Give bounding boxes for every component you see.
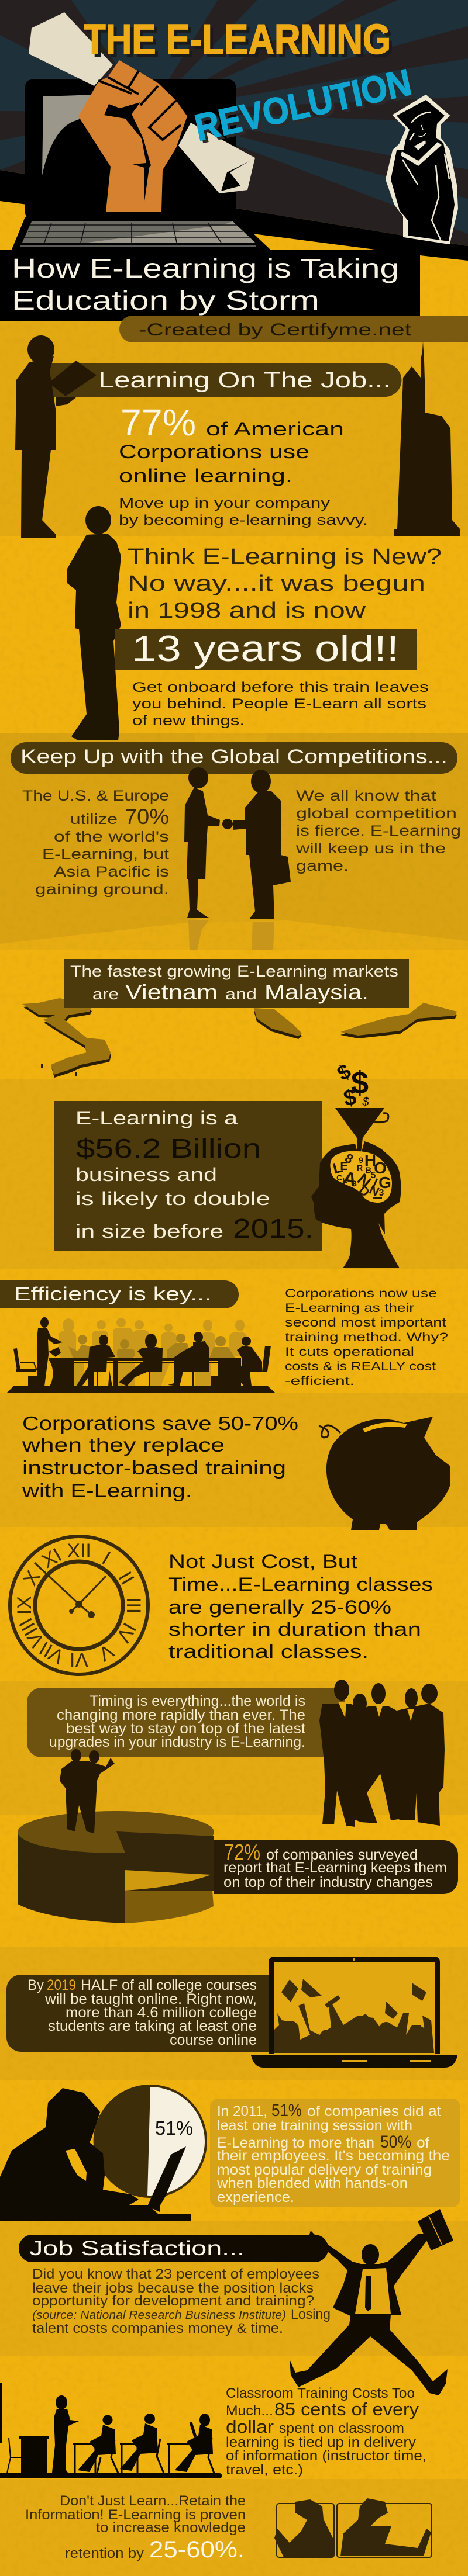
heading panel: how e-learning: [0, 250, 420, 321]
job satisfaction text: Did you know that 23 percent of employees: [32, 2266, 319, 2282]
highlight 13 years old: 13 years old!!: [132, 629, 399, 669]
heading pill: Keep Up with the Global Competitions...: [20, 746, 448, 768]
heading panel: how e-learning: How E-Learning is Taking: [12, 253, 399, 283]
panel: 56.2 billion business: [54, 1059, 401, 1268]
panel: timing is everything: [27, 1680, 445, 1827]
man at laptop silhouette: [0, 2088, 191, 2221]
seated woman: [145, 1334, 157, 1349]
onboard text: [132, 680, 429, 729]
business group silhouettes: [319, 1680, 445, 1827]
learning letters in brain: 5: [371, 1171, 376, 1180]
seated man two: [194, 1332, 203, 1342]
stat 77 percent: [119, 401, 344, 486]
jumping businessman silhouette: [290, 2209, 453, 2395]
heading pill: Efficiency is key...: [14, 1283, 211, 1304]
retention text: to increase knowledge: [96, 2520, 246, 2536]
job satisfaction text: (source: National Research Business Institute): [32, 2309, 286, 2322]
panel: 51 percent: [0, 2086, 460, 2221]
classroom text: dollar: [226, 2416, 274, 2437]
learning letters in brain: N: [354, 1170, 374, 1192]
51 percent text box: [210, 2099, 460, 2207]
left text: The U.S. & Europe: [22, 788, 169, 804]
man reading silhouette: [15, 335, 97, 538]
dollar signs: $: [362, 1096, 369, 1109]
college callout: [6, 1975, 275, 2052]
51 percent text box: of companies did at: [307, 2103, 441, 2120]
classroom text: travel, etc.): [226, 2462, 303, 2478]
savings text: [22, 1412, 298, 1501]
heading panel: how e-learning: Education by Storm: [12, 285, 319, 316]
student desks and figures: [73, 2415, 118, 2473]
markets callout: The fastest growing E-Learning markets: [70, 962, 398, 980]
left text: Asia Pacific is: [54, 864, 169, 880]
business text box: E-Learning is a: [75, 1107, 238, 1128]
clock icon: II: [113, 1568, 139, 1588]
efficiency text: -efficient.: [285, 1374, 355, 1388]
timing callout: upgrades in your industry is E-Learning.: [49, 1734, 305, 1750]
learning letters in brain: G: [378, 1173, 391, 1192]
two men walking silhouette: [60, 1749, 115, 1833]
business text box: $56.2 Billion: [76, 1133, 261, 1164]
efficiency text: training method. Why?: [285, 1331, 448, 1344]
learning letters in brain: L: [331, 1158, 345, 1178]
learning letters in brain: I: [371, 1176, 380, 1189]
72 percent callout: 72%: [224, 1840, 260, 1865]
3d pie chart: [18, 1811, 214, 1923]
job satisfaction text: [32, 2266, 331, 2336]
learning letters in brain: 9: [359, 1155, 363, 1165]
left text: gaining ground.: [35, 881, 169, 898]
onboard text: of new things.: [132, 713, 245, 729]
markets callout: Vietnam: [125, 980, 218, 1004]
efficiency text: Corporations now use: [285, 1287, 437, 1300]
learning letters in brain: B: [351, 1179, 357, 1188]
learning letters in brain: D: [356, 1183, 373, 1200]
dollar signs: $: [333, 1059, 355, 1085]
time text: Time...E-Learning classes: [168, 1574, 433, 1595]
laptop with keyboard: [12, 79, 270, 250]
college callout: 2019: [47, 1977, 76, 1993]
efficiency text: E-Learning as their: [285, 1301, 414, 1315]
title: THE E-LEARNING: [84, 16, 391, 63]
business text box: in size before: [75, 1221, 223, 1242]
efficiency text: costs & is REALLY cost: [285, 1360, 436, 1373]
clock icon: X: [19, 1567, 45, 1590]
markets callout: Malaysia.: [264, 980, 369, 1004]
time text: traditional classes.: [168, 1641, 369, 1662]
51 percent text box: experience.: [217, 2189, 294, 2205]
question text: [128, 545, 442, 623]
classroom silhouettes: [0, 2383, 222, 2478]
timing callout: Timing is everything...the world is: [90, 1693, 305, 1709]
question text: Think E-Learning is New?: [128, 545, 442, 569]
time text: [168, 1551, 433, 1662]
classroom text: Classroom Training Costs Too: [226, 2385, 415, 2401]
51 percent text box: In 2011,: [217, 2103, 267, 2120]
onboard text: you behind. People E-Learn all sorts: [132, 696, 426, 712]
second student: [120, 2414, 164, 2473]
standing presenter: [40, 1317, 49, 1328]
left chair and box: [13, 1348, 20, 1370]
meeting room silhouettes: [7, 1317, 275, 1393]
retention text: retention by: [65, 2546, 144, 2561]
learning letters in brain: [331, 1151, 391, 1200]
left text: utilize: [70, 811, 118, 827]
heading pill: [0, 1280, 239, 1308]
clock icon: [10, 1536, 148, 1674]
right text: [295, 788, 461, 874]
time text: are generally 25-60%: [168, 1597, 391, 1618]
credit pill: [119, 316, 468, 342]
learning letters in brain: N: [367, 1182, 381, 1199]
left text: E-Learning, but: [42, 846, 169, 863]
savings text: with E-Learning.: [22, 1480, 192, 1501]
classroom text: Much...: [226, 2403, 273, 2419]
panel: 72 percent: [18, 1749, 458, 1923]
stat 77 percent: 77%: [121, 401, 196, 444]
black diagonal band: [0, 170, 468, 261]
panel: retain the information: [25, 2493, 432, 2563]
panel: fastest growing markets: [22, 959, 457, 1078]
retention text: 25-60%.: [149, 2537, 245, 2563]
clock icon: XI: [38, 1544, 66, 1573]
title: THE E-LEARNING: [87, 19, 394, 66]
thinking man silhouette: [67, 506, 121, 740]
time text: shorter in duration than: [168, 1619, 421, 1640]
college callout: students are taking at least one: [48, 2018, 257, 2034]
heading pill: [11, 742, 457, 774]
panel: save 50-70 percent: [22, 1412, 450, 1530]
timing callout: [27, 1688, 345, 1757]
left text: of the world's: [54, 829, 169, 845]
efficiency text: It cuts operational: [285, 1345, 414, 1359]
move up text: [119, 496, 368, 528]
question text: in 1998 and is now: [128, 598, 366, 623]
move up text: by becoming e-learning savvy.: [119, 513, 368, 528]
classroom text: 85 cents of every: [274, 2399, 419, 2419]
clock icon: IV: [112, 1619, 140, 1646]
clock icon: I: [98, 1547, 114, 1569]
panel: time savings: [10, 1536, 433, 1674]
panel: classroom training costs: [0, 2383, 426, 2478]
graduate figure: [386, 95, 457, 244]
right text: We all know that: [296, 788, 436, 804]
learning letters in brain: C: [336, 1173, 342, 1182]
seated woman thinking with chair: [242, 1337, 251, 1346]
classroom text: of information (instructor time,: [226, 2448, 426, 2464]
panel: learning on the job: [15, 335, 460, 538]
72 percent callout: [214, 1840, 458, 1894]
torn paper pieces: [29, 12, 255, 193]
hero illustration: [0, 0, 468, 261]
right text: game.: [296, 858, 349, 874]
classroom text: [226, 2385, 426, 2478]
raised fist icon: [78, 60, 187, 212]
onboard text: Get onboard before this train leaves: [132, 680, 429, 695]
classroom text: learning is tied up in delivery: [226, 2435, 416, 2450]
markets callout: and: [225, 985, 257, 1003]
retention text: Don't Just Learn...Retain the: [60, 2493, 246, 2509]
heading pill: Job Satisfaction...: [29, 2237, 245, 2260]
map: malaysia: [254, 1003, 457, 1039]
51 percent text box: of: [417, 2135, 429, 2151]
panel: global competitions: [11, 742, 461, 950]
business text box: business and: [75, 1164, 217, 1185]
college callout: By: [27, 1977, 44, 1993]
retention text: [25, 2493, 246, 2563]
savings text: Corporations save 50-70%: [22, 1412, 298, 1434]
dollar signs: $: [342, 1085, 358, 1112]
markets callout: [64, 959, 409, 1008]
laptop with graduates: [251, 1957, 457, 2068]
72 percent callout: on top of their industry changes: [223, 1874, 433, 1891]
graduates crowd and caps: [274, 1979, 434, 2053]
learning letters in brain: H: [364, 1151, 376, 1169]
pie chart 51 percent: [94, 2086, 206, 2197]
clock icon: V: [95, 1639, 118, 1666]
funnel icon: [335, 1108, 388, 1153]
job satisfaction text: leave their jobs because the position lacks: [32, 2280, 314, 2296]
time text: Not Just Cost, But: [168, 1551, 357, 1572]
learning letters in brain: 3: [379, 1188, 384, 1198]
stat 77 percent: of American: [206, 418, 344, 439]
51 percent text box: E-Learning to more than: [217, 2135, 374, 2151]
right text: is fierce. E-Learning: [296, 823, 461, 839]
savings text: instructor-based training: [22, 1457, 286, 1479]
timing callout: changing more rapidly than ever. The: [57, 1707, 305, 1723]
job satisfaction text: opportunity for development and training?: [32, 2293, 314, 2309]
background colleagues: [58, 1318, 247, 1386]
stat 77 percent: Corporations use: [119, 441, 309, 462]
pie chart 51 percent: 51%: [155, 2117, 193, 2139]
51 percent text box: most popular delivery of training: [217, 2162, 432, 2178]
subtitle revolution: REVOLUTION: [194, 63, 418, 151]
efficiency text: [285, 1287, 448, 1388]
college callout: will be taught online. Right now,: [44, 1991, 257, 2007]
51 percent text box: least one training session with: [217, 2117, 412, 2134]
skyscraper silhouette: [394, 341, 460, 536]
timing callout: best way to stay on top of the latest: [66, 1720, 305, 1737]
right text: global competition: [296, 805, 457, 822]
dollar signs: $: [351, 1065, 369, 1100]
clock icon: VII: [36, 1637, 68, 1668]
dollar signs: [333, 1059, 369, 1112]
piggy bank icon: [319, 1417, 450, 1530]
credit pill: -Created by Certifyme.net: [139, 320, 412, 340]
third student: [167, 2414, 214, 2473]
sunburst rays: [0, 0, 468, 251]
seated man one: [99, 1335, 108, 1345]
51 percent text box: 51%: [271, 2101, 302, 2120]
move up text: Move up in your company: [119, 496, 330, 511]
panel: college courses: [6, 1957, 457, 2068]
framed learners silhouettes: [274, 2498, 432, 2557]
51 percent text box: when blended with hands-on: [216, 2175, 408, 2191]
handshake silhouettes: [184, 767, 291, 950]
51 percent text box: 50%: [380, 2132, 411, 2152]
clock icon: VIII: [15, 1614, 49, 1651]
college callout: more than 4.6 million college: [66, 2004, 257, 2021]
clock icon: XII: [67, 1540, 91, 1562]
stat 77 percent: online learning.: [119, 465, 292, 486]
retention text: Information! E-Learning is proven: [25, 2507, 246, 2523]
classroom text: spent on classroom: [279, 2421, 404, 2436]
middle row colleagues: [68, 1334, 235, 1358]
job satisfaction text: talent costs companies money & time.: [32, 2321, 283, 2336]
72 percent callout: of companies surveyed: [266, 1847, 418, 1863]
heading pill: Learning On The Job...: [98, 368, 391, 393]
right text: will keep us in the: [295, 840, 446, 857]
72 percent callout: report that E-Learning keeps them: [223, 1860, 447, 1876]
heading pill: [19, 2235, 328, 2262]
business text box: 2015.: [233, 1213, 314, 1244]
panel: 13 years old: [67, 506, 442, 740]
learning letters in brain: B: [366, 1165, 371, 1175]
question text: No way....it was begun: [128, 572, 425, 596]
head with learning brain: [311, 1141, 401, 1268]
subtitle revolution: REVOLUTION: [191, 61, 415, 149]
efficiency text: second most important: [285, 1316, 446, 1329]
learning letters in brain: E: [340, 1160, 348, 1173]
clock icon: IX: [13, 1596, 36, 1615]
left text: 70%: [125, 805, 169, 829]
clock icon: III: [122, 1597, 144, 1614]
learning letters in brain: R: [357, 1163, 363, 1172]
51 percent text box: their employees. It's becoming the: [217, 2148, 450, 2164]
learning letters in brain: 8: [342, 1151, 356, 1166]
learning letters in brain: O: [374, 1159, 387, 1177]
college callout: HALF of all college courses: [81, 1977, 257, 1993]
heading pill: [44, 363, 401, 397]
learning letters in brain: K: [343, 1176, 348, 1185]
panel: job satisfaction: [19, 2209, 453, 2395]
map: vietnam: [22, 998, 111, 1078]
savings text: when they replace: [22, 1434, 225, 1456]
left text: [22, 788, 169, 898]
learning letters in brain: A: [340, 1167, 359, 1190]
college callout: course online: [170, 2032, 257, 2048]
business text box: is likely to double: [75, 1188, 270, 1209]
business text box: [54, 1101, 322, 1251]
job satisfaction text: Losing: [291, 2307, 331, 2322]
panel: efficiency is key: [0, 1280, 448, 1393]
markets callout: are: [92, 985, 119, 1003]
clock icon: VI: [70, 1649, 88, 1671]
table and people: [7, 1317, 275, 1393]
